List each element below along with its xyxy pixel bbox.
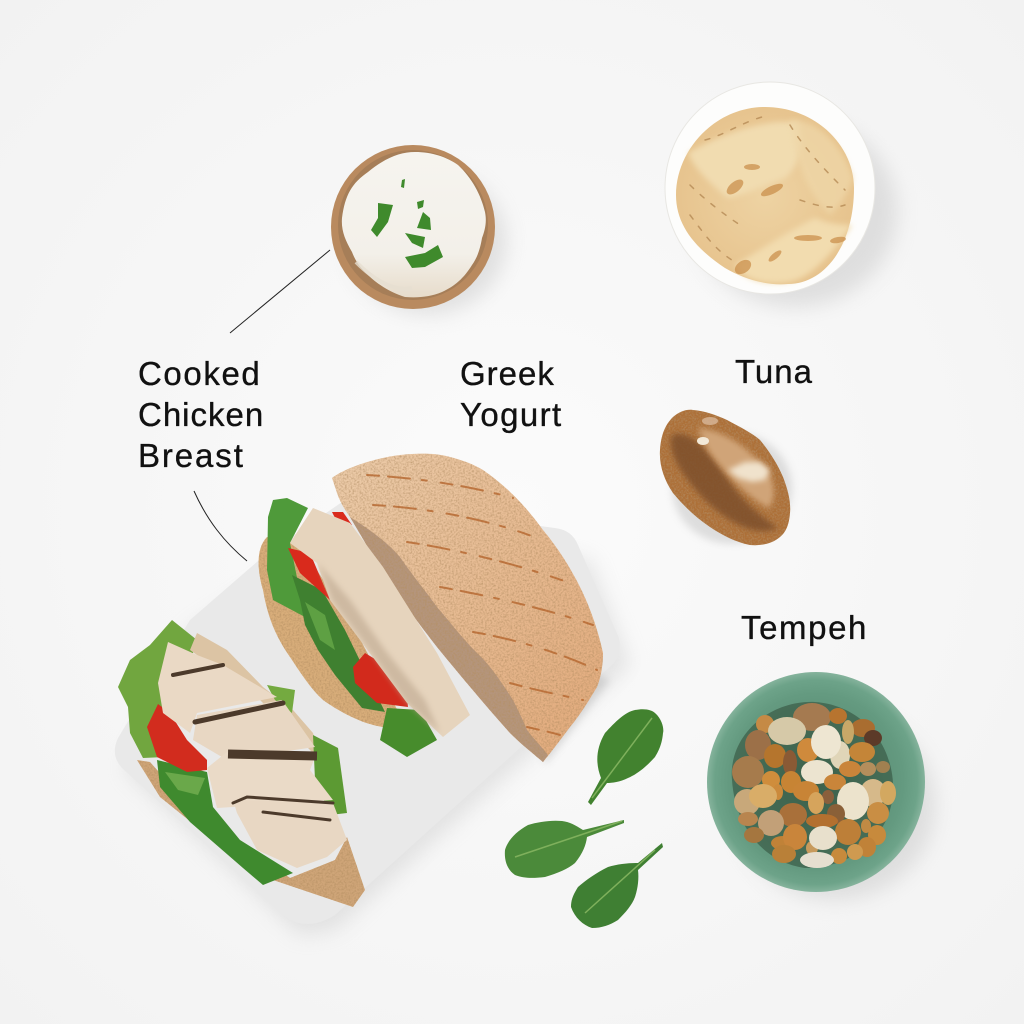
lettuce leaf <box>267 498 308 617</box>
yogurt bowl <box>331 145 506 314</box>
tempeh piece <box>660 410 792 545</box>
grill marks <box>173 665 333 820</box>
label: Tempeh: Tempeh <box>741 609 868 646</box>
nuts <box>732 703 896 868</box>
callout curve to board <box>194 491 247 561</box>
chicken strips <box>158 642 277 733</box>
chicken <box>290 508 470 737</box>
spinach leaf middle <box>505 820 624 878</box>
pita half <box>332 454 610 765</box>
spinach leaf right <box>588 709 663 805</box>
tomato top <box>288 548 330 600</box>
lettuce pale patch <box>165 772 205 795</box>
label: Greek Yogurt: Yogurt <box>460 396 563 433</box>
label: Greek Yogurt: Greek <box>460 355 555 392</box>
middle sandwich <box>259 498 470 757</box>
lower lettuce <box>380 708 437 757</box>
left sandwich <box>118 620 365 907</box>
label: Cooked Chicken Breast: Breast <box>138 437 245 474</box>
nuts bowl <box>707 672 935 900</box>
label: Cooked Chicken Breast: Cooked <box>138 355 261 392</box>
lower lettuce <box>157 760 293 885</box>
tomato <box>147 704 207 772</box>
herbs <box>371 179 443 268</box>
spinach leaf bottom <box>571 843 663 928</box>
marble board <box>115 500 630 935</box>
label: Cooked Chicken Breast: Chicken <box>138 396 264 433</box>
lettuce highlight <box>305 602 335 650</box>
tomato bottom <box>353 653 408 707</box>
bread crust <box>259 537 400 727</box>
callout line: chicken to yogurt <box>230 250 330 333</box>
chicken crust edge <box>318 563 440 733</box>
tomato sliver <box>332 512 352 525</box>
right lettuce lower <box>313 735 347 815</box>
label: Tuna: Tuna <box>735 353 813 390</box>
top bread <box>190 633 320 760</box>
back lettuce <box>118 620 197 758</box>
bottom crust <box>137 760 365 907</box>
dark lettuce <box>292 575 385 712</box>
right lettuce <box>267 685 295 713</box>
tuna bowl <box>665 82 897 307</box>
